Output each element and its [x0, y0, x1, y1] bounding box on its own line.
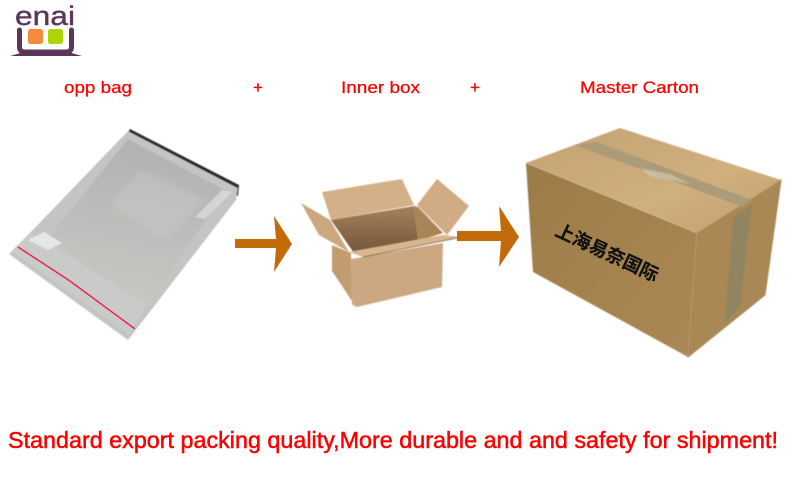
- logo wordmark: enai: [15, 1, 75, 31]
- heading: opp bag: opp bag: [64, 78, 132, 97]
- plus sign 1: +: [253, 78, 263, 97]
- tape on top: [575, 142, 752, 207]
- footer statement: Standard export packing quality,More durable and and safety for shipment!: [8, 427, 778, 453]
- bag outer film: [9, 131, 238, 340]
- bag right reflection: [195, 190, 232, 219]
- bag red adhesive strip: [18, 247, 135, 329]
- carton marking: 上海易奈国际: [552, 220, 662, 286]
- front face: [351, 243, 443, 307]
- master carton illustration: [526, 128, 781, 357]
- plus sign 2: +: [470, 78, 480, 97]
- logo green square: [48, 29, 63, 44]
- back flap: [322, 179, 414, 220]
- bag highlight: [110, 170, 205, 240]
- inner box illustration: [301, 179, 469, 307]
- bag dark back edge: [128, 129, 239, 196]
- left face: [332, 245, 356, 307]
- left flap: [301, 203, 349, 252]
- tape highlight: [640, 168, 690, 184]
- arrow 1: [235, 216, 292, 272]
- bag body: [50, 139, 226, 304]
- interior back wall: [331, 206, 418, 253]
- logo: enai: [10, 1, 82, 56]
- carton front face: [526, 163, 697, 357]
- interior right wall: [414, 206, 443, 241]
- logo orange square: [28, 29, 43, 44]
- arrow 2: [457, 206, 519, 267]
- heading: Master Carton: Master Carton: [580, 78, 699, 97]
- front flap: [349, 235, 462, 257]
- bag seal flap: [12, 233, 146, 335]
- heading: Inner box: Inner box: [341, 78, 421, 97]
- logo basket: [20, 30, 72, 52]
- carton top: [526, 128, 781, 233]
- bag flap highlight: [28, 232, 62, 250]
- logo base line: [10, 52, 82, 56]
- opp bag illustration: [9, 129, 239, 340]
- carton right face: [688, 180, 781, 357]
- right flap: [417, 179, 469, 235]
- tape on right side: [725, 205, 752, 323]
